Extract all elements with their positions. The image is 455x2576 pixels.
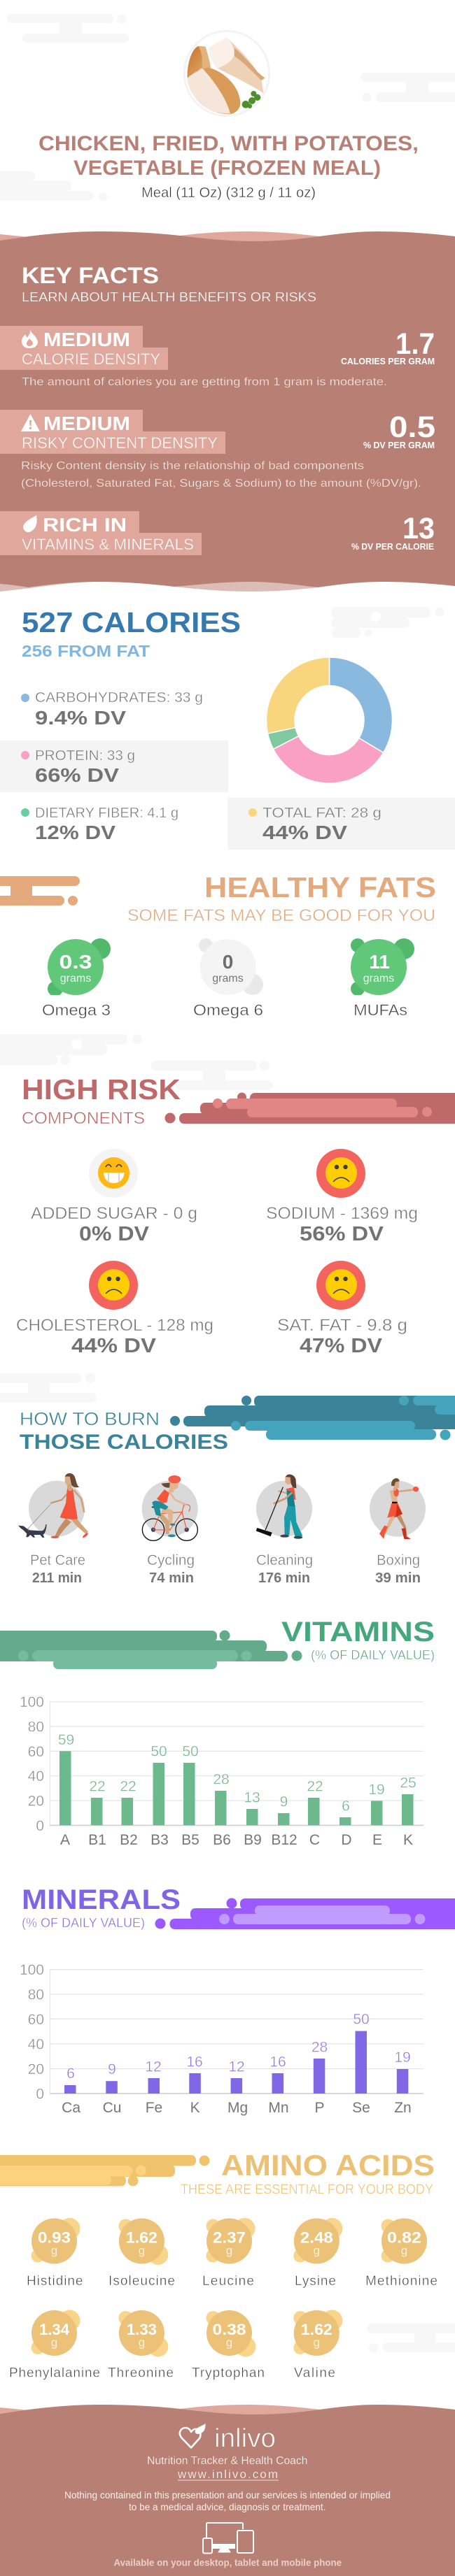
disclaimer: to be a medical advice, diagnosis or treatment. (129, 2501, 326, 2512)
stat: omega 3: grams (60, 973, 91, 985)
bar chart: vitamins: 9 (280, 1794, 288, 1810)
decorative cloud: purple (155, 1898, 455, 1929)
fact: rich in vitamins and minerals (0, 511, 435, 555)
bar chart: minerals: 16 (186, 2054, 203, 2070)
panel: calories (0, 606, 455, 850)
bar chart: vitamins: B9 (244, 1832, 262, 1848)
amino: methionine: g (401, 2244, 407, 2257)
amino: threonine: Threonine (108, 2366, 174, 2380)
icon: woman walking dog (18, 1473, 89, 1538)
bar chart: vitamins: K (403, 1832, 413, 1848)
amino: tryptophan: g (226, 2335, 232, 2349)
disclaimer (64, 2489, 391, 2512)
bar chart: vitamins: 19 (368, 1782, 385, 1798)
fact: risky content density: % DV PER GRAM (363, 440, 435, 450)
heading: healthy fats: HEALTHY FATS (204, 871, 436, 903)
panel: healthy fats (0, 871, 436, 1019)
amino: valine (293, 2310, 342, 2380)
icon: sad face (326, 1269, 357, 1301)
heading: how to burn: HOW TO BURN (20, 1408, 160, 1429)
amino: tryptophan: 0.38 (213, 2321, 246, 2338)
bar chart: minerals: 16 (270, 2054, 286, 2070)
bar chart: minerals: 0 (36, 2087, 44, 2102)
fact: calorie density (0, 326, 435, 388)
fact: risky content density: RISKY CONTENT DENSITY (22, 434, 218, 452)
donut chart (266, 657, 392, 783)
panel: high risk components (0, 1034, 455, 1357)
stat: MUFAs: grams (363, 973, 394, 985)
serving size: Meal (11 Oz) (312 g / 11 oz) (141, 185, 316, 201)
amino: leucine: 2.37 (213, 2229, 246, 2246)
activity: cycling (142, 1475, 198, 1586)
bar chart: vitamins: 25 (400, 1775, 416, 1791)
fact: calorie density: MEDIUM (43, 329, 130, 350)
fact: calorie density: CALORIE DENSITY (22, 350, 160, 368)
fact: risky content density: MEDIUM (43, 413, 130, 434)
food photo: fried chicken (184, 31, 270, 116)
subheading: minerals: (% OF DAILY VALUE) (22, 1916, 145, 1930)
amino: threonine: 1.33 (127, 2321, 157, 2338)
bar chart: minerals: 60 (28, 2012, 44, 2028)
bar chart: vitamins: 22 (120, 1779, 136, 1794)
activity: boxing: Boxing (377, 1552, 420, 1568)
bar chart: minerals: 50 (353, 2011, 370, 2027)
icon: happy face (98, 1157, 130, 1189)
bar chart: vitamins: 22 (307, 1779, 323, 1794)
fact: calorie density: 1.7 (396, 327, 435, 361)
amino: phenylalanine: g (51, 2335, 57, 2349)
amino: leucine: g (226, 2244, 232, 2257)
icon: woman on bicycle (142, 1475, 198, 1540)
risk item: sodium: SODIUM - 1369 mg (266, 1204, 418, 1223)
activity: boxing (370, 1478, 426, 1586)
legend: dietary fiber (21, 806, 178, 843)
bar chart: minerals: Cu (103, 2100, 121, 2116)
icon: devices (203, 2523, 253, 2554)
risk item: saturated fat: SAT. FAT - 9.8 g (277, 1316, 407, 1335)
amino: lysine: Lysine (295, 2274, 336, 2289)
bar chart: vitamins: B3 (150, 1832, 169, 1848)
activity: pet care: Pet Care (30, 1552, 85, 1568)
stat: omega 3: 0.3 (59, 951, 92, 973)
bar chart: minerals: Fe (146, 2100, 162, 2116)
bar chart: minerals: 19 (394, 2049, 411, 2066)
activity: cycling: 74 min (149, 1570, 194, 1586)
tagline: Nutrition Tracker & Health Coach (147, 2455, 308, 2467)
activity: boxing: 39 min (375, 1570, 421, 1586)
heading: vitamins: VITAMINS (281, 1617, 435, 1647)
bar chart: vitamins: 0 (36, 1818, 44, 1834)
risk item: cholesterol: CHOLESTEROL - 128 mg (16, 1316, 214, 1335)
bar chart: minerals: 100 (20, 1962, 44, 1978)
risk item: added sugar (31, 1149, 197, 1245)
fact: risky content density: 0.5 (389, 410, 435, 444)
fact: calorie density: CALORIES PER GRAM (341, 356, 435, 366)
amino: histidine (27, 2218, 83, 2289)
legend: dietary fiber: DIETARY FIBER: 4.1 g (35, 806, 178, 821)
bar chart: vitamins: E (372, 1832, 382, 1848)
legend: total fat (248, 806, 382, 843)
title: VEGETABLE (FROZEN MEAL) (74, 157, 381, 180)
risk item: cholesterol (16, 1261, 214, 1357)
heading: amino acids: AMINO ACIDS (221, 2149, 435, 2182)
bar chart: vitamins (20, 1694, 424, 1848)
bar chart: minerals: Zn (394, 2100, 412, 2116)
decorative cloud: yellow (0, 2155, 210, 2186)
bar chart: minerals: Ca (62, 2100, 80, 2116)
disclaimer: Nothing contained in this presentation and our services is intended or implied (64, 2489, 391, 2500)
panel: key facts (0, 231, 455, 592)
bar chart: vitamins: B12 (271, 1832, 298, 1848)
legend: carbohydrates (21, 690, 203, 729)
decorative cloud: orange (0, 876, 80, 906)
bar chart: vitamins: D (341, 1832, 352, 1848)
legend: total fat: 44% DV (262, 822, 347, 843)
amino: tryptophan: Tryptophan (192, 2366, 265, 2380)
bar chart: vitamins: 59 (58, 1732, 74, 1748)
amino: phenylalanine: 1.34 (39, 2321, 70, 2338)
availability note: Available on your desktop, tablet and mobile phone (113, 2556, 342, 2568)
amino: methionine (365, 2218, 438, 2289)
bar chart: vitamins: 50 (150, 1744, 167, 1759)
legend: carbohydrates: CARBOHYDRATES: 33 g (35, 690, 203, 706)
activity: cycling: Cycling (147, 1552, 195, 1568)
bar chart: minerals: Se (352, 2100, 370, 2116)
bar chart: minerals: 12 (228, 2059, 245, 2075)
bar chart: vitamins: B6 (213, 1832, 231, 1848)
amino: valine: Valine (294, 2366, 335, 2380)
risk item: sodium: 56% DV (300, 1223, 384, 1245)
bar chart: vitamins: 28 (213, 1772, 230, 1787)
bar chart: vitamins: 60 (28, 1744, 44, 1760)
title (38, 132, 419, 180)
bar chart: vitamins: C (309, 1832, 320, 1848)
stat: omega 6: grams (212, 973, 244, 985)
bar chart: vitamins: B1 (88, 1832, 106, 1848)
activity: cleaning (256, 1475, 313, 1586)
subheading: healthy fats: SOME FATS MAY BE GOOD FOR YOU (127, 906, 435, 925)
bar chart: minerals: P (314, 2100, 325, 2116)
panel: amino acids (0, 2149, 455, 2380)
icon: leaf (23, 515, 37, 532)
icon: boxer (370, 1478, 426, 1539)
heading: calories: 527 CALORIES (22, 606, 241, 638)
icon: sad face (326, 1157, 357, 1189)
bar chart: vitamins: A (60, 1832, 70, 1848)
icon: warning (21, 414, 40, 431)
subheading: from fat: 256 FROM FAT (22, 642, 150, 660)
bar chart: vitamins: B2 (120, 1832, 138, 1848)
legend: protein: PROTEIN: 33 g (35, 748, 135, 764)
amino: leucine: Leucine (202, 2274, 254, 2289)
amino: threonine (108, 2310, 174, 2380)
bar chart: minerals: 12 (145, 2059, 162, 2075)
stat: MUFAs: 11 (369, 951, 390, 973)
amino: lysine: g (314, 2244, 320, 2257)
risk item: saturated fat: 47% DV (300, 1335, 383, 1357)
panel: how to burn those calories (0, 1373, 455, 1586)
amino: isoleucine: g (139, 2244, 145, 2257)
bar chart: minerals (20, 1962, 424, 2116)
legend: protein (21, 748, 135, 786)
heading: those calories: THOSE CALORIES (20, 1431, 228, 1454)
amino: valine: 1.62 (301, 2321, 332, 2338)
amino: lysine (293, 2218, 342, 2289)
bar chart: minerals: 40 (28, 2036, 44, 2053)
panel: vitamins (0, 1617, 435, 1848)
bar chart: vitamins: 22 (89, 1779, 106, 1794)
legend: carbohydrates: 9.4% DV (35, 707, 126, 729)
fact: calorie density: The amount of calories you are getting from 1 gram is moderate. (22, 376, 387, 388)
decorative cloud: red (165, 1092, 455, 1124)
stat: omega 6: 0 (223, 951, 233, 973)
subheading: vitamins: (% OF DAILY VALUE) (311, 1648, 435, 1662)
legend: dietary fiber: 12% DV (35, 822, 115, 843)
amino: methionine: 0.82 (387, 2229, 421, 2246)
bar chart: minerals: 20 (28, 2061, 44, 2077)
icon: flame (22, 329, 38, 348)
heading: high risk: HIGH RISK (22, 1073, 181, 1105)
logo: inlivo (180, 2424, 276, 2453)
logo: inlivo: inlivo (214, 2424, 276, 2453)
bar chart: vitamins: 80 (28, 1719, 44, 1736)
title: CHICKEN, FRIED, WITH POTATOES, (38, 132, 419, 155)
stat: omega 6: Omega 6 (193, 1001, 263, 1019)
fact: risky content density (0, 410, 435, 489)
amino: histidine: g (51, 2244, 57, 2257)
risk item: added sugar: 0% DV (79, 1223, 150, 1245)
amino: threonine: g (139, 2335, 145, 2349)
decorative cloud: green (0, 1631, 302, 1669)
subheading: key facts: LEARN ABOUT HEALTH BENEFITS OR RISKS (22, 290, 316, 304)
activity: cleaning: Cleaning (256, 1552, 313, 1568)
fact: risky content density: (Cholesterol, Saturated Fat, Sugars & Sodium) to the amount (%DV/gr). (21, 478, 421, 489)
bar chart: vitamins: 20 (28, 1793, 44, 1810)
amino: methionine: Methionine (365, 2274, 438, 2289)
decorative cloud: teal (170, 1396, 455, 1440)
website link: www.inlivo.com (177, 2468, 278, 2481)
heading: key facts: KEY FACTS (22, 263, 159, 288)
amino: histidine: Histidine (27, 2274, 83, 2289)
amino: tryptophan (192, 2310, 265, 2380)
stat: omega 3: Omega 3 (42, 1001, 111, 1019)
activity: cleaning: 176 min (258, 1570, 310, 1586)
stat: MUFAs (351, 938, 414, 1019)
legend: total fat: TOTAL FAT: 28 g (262, 806, 382, 821)
legend: protein: 66% DV (35, 764, 119, 786)
background clouds: header (0, 14, 455, 201)
activity: pet care: 211 min (32, 1570, 82, 1586)
bar chart: minerals: Mn (268, 2100, 289, 2116)
amino: valine: g (314, 2335, 320, 2349)
risk item: added sugar: ADDED SUGAR - 0 g (31, 1204, 197, 1223)
amino: phenylalanine (9, 2310, 100, 2380)
icon: sad face (98, 1269, 130, 1301)
risk item: cholesterol: 44% DV (71, 1335, 157, 1357)
bar chart: minerals: 80 (28, 1987, 44, 2003)
bar chart: vitamins: 50 (182, 1744, 199, 1759)
bar chart: minerals: 6 (66, 2066, 75, 2082)
fact: risky content density: Risky Content density is the relationship of bad components (21, 460, 364, 472)
bar chart: minerals: Mg (227, 2100, 248, 2116)
bar chart: vitamins: 40 (28, 1768, 44, 1784)
bar chart: minerals: K (190, 2100, 200, 2116)
amino: isoleucine (108, 2218, 175, 2289)
amino: lysine: 2.48 (300, 2229, 333, 2246)
subheading: components: COMPONENTS (22, 1109, 145, 1128)
stat: MUFAs: MUFAs (354, 1001, 407, 1019)
bar chart: vitamins: B5 (181, 1832, 200, 1848)
bar chart: minerals: 9 (108, 2061, 116, 2077)
amino: leucine (202, 2218, 255, 2289)
fact: rich in vitamins and minerals: VITAMINS & MINERALS (22, 536, 194, 553)
amino: isoleucine: 1.62 (126, 2229, 158, 2246)
fact: rich in vitamins and minerals: % DV PER CALORIE (351, 541, 434, 552)
risk item: sodium (266, 1149, 418, 1245)
subheading: amino acids: THESE ARE ESSENTIAL FOR YOUR BODY (181, 2182, 433, 2197)
amino: isoleucine: Isoleucine (108, 2274, 175, 2289)
bar chart: vitamins: 13 (244, 1790, 260, 1805)
fact: rich in vitamins and minerals: 13 (402, 512, 435, 545)
stat: omega 6 (193, 938, 263, 1019)
bar chart: minerals: 28 (312, 2039, 328, 2055)
panel: minerals (20, 1884, 455, 2116)
amino: histidine: 0.93 (38, 2229, 71, 2246)
heading: minerals: MINERALS (22, 1884, 181, 1915)
icon: woman with broom (256, 1475, 312, 1539)
activity: pet care (18, 1473, 89, 1586)
panel: footer (0, 2405, 455, 2576)
bar chart: vitamins: 6 (342, 1798, 350, 1814)
fact: rich in vitamins and minerals: RICH IN (43, 514, 127, 536)
risk item: saturated fat (277, 1261, 407, 1357)
stat: omega 3 (42, 938, 111, 1019)
bar chart: vitamins: 100 (20, 1694, 44, 1710)
amino: phenylalanine: Phenylalanine (9, 2366, 100, 2380)
